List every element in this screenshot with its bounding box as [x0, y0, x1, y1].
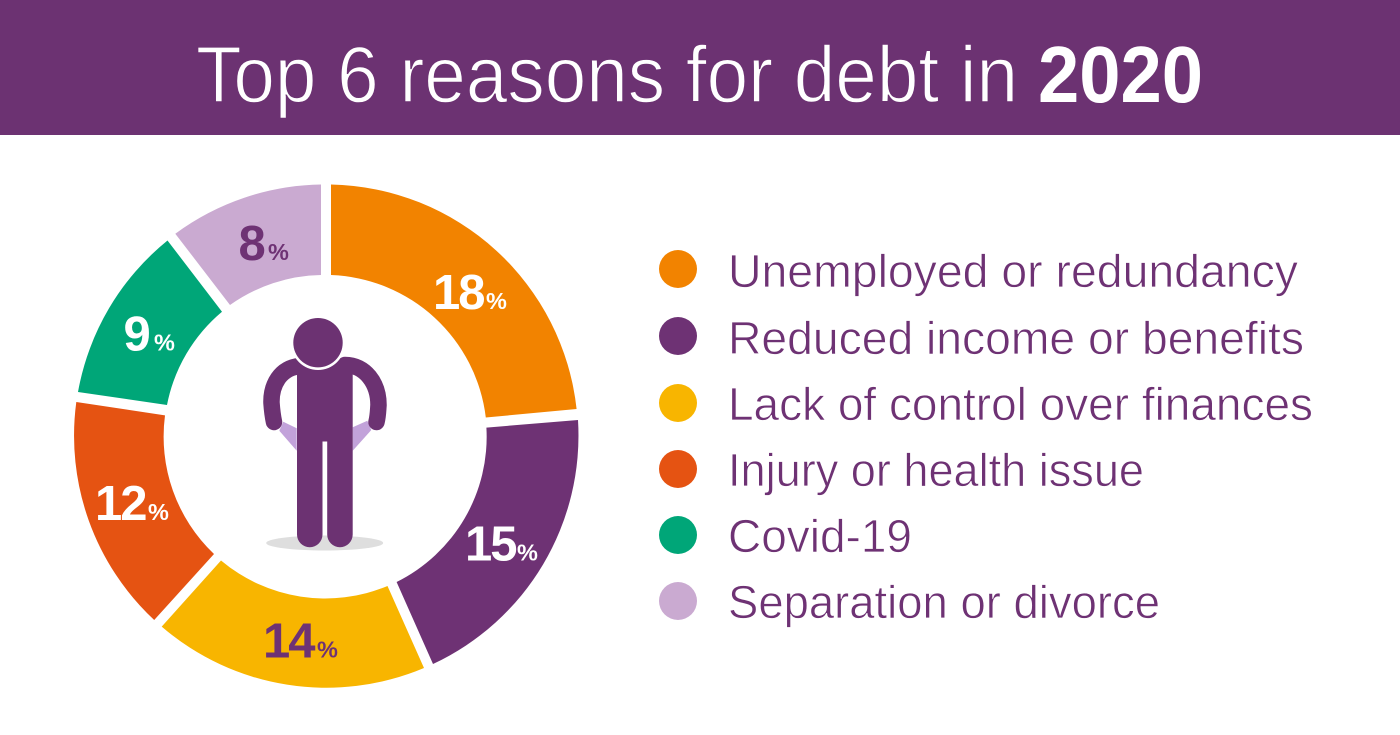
torso and legs [297, 358, 353, 547]
shadow [266, 536, 383, 550]
title banner [0, 0, 1400, 135]
icon: person with empty pockets [266, 316, 383, 550]
legend [659, 245, 1313, 628]
label: 14% [263, 614, 338, 668]
legend item: injury: Injury or health issue [728, 444, 1144, 496]
legend item: unemployed: Unemployed or redundancy [728, 245, 1298, 297]
empty pockets [279, 421, 371, 451]
segment: injury or health 12% [74, 402, 214, 620]
label: 8%: % [268, 239, 289, 265]
label: 14%: 14 [263, 614, 315, 668]
label: 15% [465, 518, 538, 572]
label: 9% [124, 308, 175, 362]
segment: unemployed 18% [331, 184, 577, 418]
segment: lack of control 14% [162, 560, 424, 688]
title banner: Top 6 reasons for debt in [196, 30, 1018, 119]
label: 18%: 18 [433, 266, 484, 320]
segment: covid-19 9% [78, 240, 222, 405]
label: 9%: % [154, 330, 175, 356]
segment: separation 8% [175, 184, 321, 305]
legend item: covid: Covid-19 [728, 510, 912, 562]
label: 12%: % [148, 499, 169, 525]
label: 18%: % [486, 288, 507, 314]
legend item: lack of control: Lack of control over finances [728, 378, 1313, 430]
donut chart [74, 184, 578, 688]
legend item: separation: Separation or divorce [728, 576, 1160, 628]
segment: reduced income 15% [397, 420, 578, 664]
label: 8%: 8 [238, 217, 266, 271]
legend item: reduced income: Reduced income or benefits [728, 312, 1304, 364]
arms [271, 365, 378, 422]
label: 15%: 15 [465, 518, 516, 572]
label: 9%: 9 [124, 308, 151, 362]
label: 18% [433, 266, 507, 320]
label: 15%: % [517, 540, 538, 566]
label: 12%: 12 [95, 477, 146, 531]
title banner: 2020 [1038, 30, 1203, 119]
label: 14%: % [317, 636, 338, 662]
label: 8% [238, 217, 289, 271]
label: 12% [95, 477, 169, 531]
head [291, 316, 345, 370]
